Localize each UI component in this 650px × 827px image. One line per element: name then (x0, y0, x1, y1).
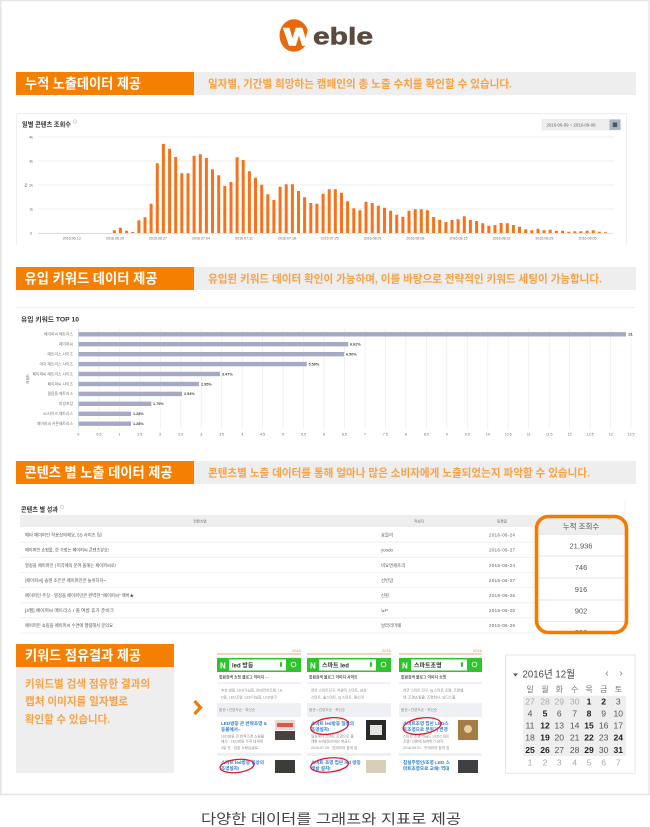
x axis values: 6.5 (342, 432, 347, 436)
x axis values: 11 (527, 432, 531, 436)
table header row (20, 515, 539, 527)
keyword labels: 페이퍼씨 (59, 342, 73, 346)
search capture 3: 스마트조명: 2016.09.01 · 인테리어 참의 집 (403, 745, 449, 750)
value labels (133, 333, 633, 426)
keyword labels (32, 332, 74, 426)
search capture 2: 스마트 led: 조명설치! (311, 726, 330, 733)
date grid: 1 (587, 696, 592, 706)
weekday row: 목 (585, 685, 593, 694)
date grid: 19 (540, 732, 550, 742)
search capture 2: 스마트 led: N (310, 662, 316, 670)
search capture 3: 스마트조명 (399, 648, 483, 773)
date grid: 9 (601, 708, 606, 718)
date grid: 27 (555, 745, 564, 755)
search capture 3: 스마트조명: 트조명으로 분위기 변경 (403, 726, 448, 733)
search capture 3: 스마트조명: 스마트 조명 버금드 LED스마트 (403, 734, 450, 738)
date grid: 6 (557, 708, 562, 718)
search capture 2: 스마트 led: 생활 설치! (311, 765, 331, 772)
description: 일자별, 기간별 희망하는 캠페인의 총 노출 수치를 확인할 수 있습니다. (208, 76, 512, 90)
date grid: 6 (601, 757, 606, 767)
date grid: 30 (570, 696, 580, 706)
x axis values: 7 (364, 432, 366, 436)
x axis date labels: 2016.06.13 (63, 236, 81, 240)
table rows: 선빈맘 (381, 577, 393, 583)
search capture 2: 스마트 led: 스마트 조명 집안 led 방등 (311, 759, 362, 766)
value labels: 1.28% (133, 422, 144, 426)
date range picker (542, 120, 620, 130)
arrow: chevron (194, 701, 200, 714)
x axis date labels: 2016.08.01 (364, 236, 382, 240)
date grid: 28 (570, 745, 580, 755)
date grid: 5 (543, 708, 548, 718)
search capture 2: 스마트 led: 통합검색 블로그 이미지 사이트 (309, 674, 358, 680)
x axis date labels: 2016.08.08 (406, 236, 424, 240)
date grid: 27 (525, 696, 535, 706)
date grid: 7 (572, 708, 577, 718)
bars (79, 332, 626, 426)
heading: 누적 노출데이터 제공 (25, 76, 141, 92)
table rows: 뇨P (381, 608, 388, 613)
search capture 2: 스마트 led: 2016 (382, 648, 392, 653)
date grid: 5 (587, 757, 592, 767)
x axis values: 2.5 (178, 432, 183, 436)
x axis values: 1.5 (137, 432, 142, 436)
table title: 콘텐츠 별 성과 (21, 504, 58, 514)
calendar: 2016년 12월 (506, 655, 635, 773)
heading: 키워드 점유결과 제공 (25, 648, 141, 664)
table header row: 등록일 (497, 518, 507, 524)
x axis date labels (63, 236, 596, 240)
date grid: 4 (572, 757, 577, 767)
search capture 3: 스마트조명: 엔, 조명쇼핑몰, 조명회사, 닐디스플 (403, 694, 456, 700)
date range picker: 2016-06-09 ~ 2016-09-08 (546, 122, 596, 128)
y axis labels: 2k (29, 184, 33, 188)
keyword labels: 페이퍼씨 매트리스 (44, 332, 74, 337)
table rows: 2016-06-24 (489, 532, 516, 538)
caption: 다양한 데이터를 그래프와 지표로 제공 (201, 811, 461, 827)
month title: 2016년 12월 (522, 668, 575, 680)
month arrows (606, 672, 622, 676)
value labels: 6.50% (346, 352, 357, 356)
date grid: 14 (570, 720, 580, 730)
search capture 2: 스마트 led: 연관 스마트전구, 차량지 스마트, 삼성 (311, 688, 367, 692)
panel: inbound keywords top 10 chart (16, 308, 635, 436)
search capture 3: 스마트조명: 옵션 • 관련도순 · 최신순 (401, 707, 438, 712)
search capture 1: led 방등 (217, 648, 302, 774)
keyword labels: 매트리스 사이즈 (47, 352, 73, 356)
x axis date labels: 2016.06.27 (149, 236, 167, 240)
table rows: [4월] 페이퍼씨 매트리스 / 올 여름 휴가 준비크 (25, 607, 114, 614)
date grid: 18 (525, 732, 535, 742)
date grid: 24 (614, 732, 623, 742)
column heading: 누적 조회수 (563, 521, 599, 531)
table rows: 페이퍼민 주장 · 열정을 페이퍼민큰 완벽한 "페이퍼씨" 매버★ (25, 592, 135, 599)
x axis values: 12 (568, 432, 572, 436)
search capture 1: led 방등: 2016 (292, 648, 302, 653)
table rows: yoodo (381, 548, 394, 552)
x axis values: 5 (282, 432, 284, 436)
heading: 유입 키워드 데이터 제공 (24, 270, 158, 286)
search capture 3: 스마트조명: N (402, 662, 408, 670)
weekday row: 화 (556, 685, 564, 694)
x axis values: 9 (446, 432, 448, 436)
description: 키워드별 검색 점유한 결과의 (25, 676, 150, 690)
date grid: 29 (584, 745, 594, 755)
x axis date labels: 2016.06.20 (106, 236, 124, 240)
table rows: 2016-06-20 (489, 608, 516, 613)
search capture 2: 스마트 led: 레한 led방등이에요 버금드 (311, 738, 352, 744)
row dividers (20, 542, 535, 633)
y axis labels (24, 136, 33, 236)
y axis labels: 값 (24, 182, 28, 188)
weekday row: 토 (615, 685, 622, 694)
search capture 1: led 방등: led 방등 (232, 662, 254, 670)
search capture 1: led 방등: 4일 전 · 집밥 사랑님글로 (221, 745, 259, 750)
search capture 3: 스마트조명: 조명! 간편에 설치하기 남자 (403, 738, 444, 744)
search capture 1: led 방등: 추천 방등, LED거실등, 인테리어조명, LE (221, 688, 283, 692)
highlighted column: cumulative views: 806 (575, 628, 587, 637)
date grid: 3 (616, 696, 621, 706)
table rows: 2016-06-27 (489, 578, 516, 583)
x axis date labels: 2016.09.05 (578, 236, 596, 240)
search capture 3: 스마트조명: 연관 스마트 전구, lg 스마트 조명, 조명엘 (403, 688, 464, 692)
y axis labels: 3k (29, 160, 33, 164)
table header row: 컨텐츠명 (193, 518, 207, 524)
date grid: 23 (599, 732, 609, 742)
x axis values: 3.5 (219, 432, 224, 436)
date grid: 31 (614, 745, 623, 755)
help icon (73, 120, 77, 123)
table rows: 날라리마왜 (381, 622, 401, 629)
date grid: 12 (540, 720, 550, 730)
search capture 1: led 방등: 에서 - LED방등 가격 대격세 (221, 738, 263, 744)
table rows: 페이퍼민 쇼핑몰, 한 가정는 페이퍼씨 콘텐츠뷰요! (25, 546, 109, 554)
search capture 2: 스마트 led: 스마트, 솔스마트, lg 스마트, 원스마 (311, 694, 364, 700)
logo: Weble: eble (313, 24, 373, 50)
x axis values: 10 (486, 432, 490, 436)
date grid: 20 (555, 732, 564, 742)
keyword labels: 여자 매트리스 사이즈 (39, 361, 73, 366)
x axis date labels: 2016.07.04 (192, 236, 210, 240)
value labels: 3.47% (222, 372, 233, 376)
table rows: 페이퍼민 쇼핑을 페이퍼씨 수면에 행렬해서 문의요 (25, 622, 113, 629)
keyword labels: 페이퍼씨 사이즈 (47, 381, 73, 386)
x axis values: 9.5 (465, 432, 470, 436)
weekday row: 월 (541, 684, 549, 694)
x axis values (77, 432, 634, 436)
search capture 2: 스마트 led: 일상에서 스마트 조명으로 즐 (311, 734, 354, 738)
x axis values: 1 (118, 432, 120, 436)
logo: Weble: W (284, 24, 314, 51)
y axis labels: 1k (29, 208, 33, 212)
table rows: 신핀 (381, 592, 389, 598)
x axis values: 13 (609, 432, 613, 436)
highlighted column: cumulative views (535, 515, 628, 637)
section header: 유입 키워드 데이터 제공 (16, 267, 636, 290)
value labels: 2.54% (184, 392, 195, 396)
search capture 1: led 방등: 등불에서~ (221, 726, 241, 733)
x axis values: 4.5 (260, 432, 265, 436)
x axis date labels: 2016.08.15 (450, 236, 468, 240)
highlighted column: cumulative views: 902 (575, 606, 587, 616)
x axis date labels: 2016.08.29 (535, 236, 553, 240)
x axis values: 0 (77, 432, 79, 436)
search capture 2: 스마트 led (307, 648, 392, 774)
x axis date labels: 2016.07.25 (321, 236, 339, 240)
x axis values: 11.5 (546, 432, 553, 436)
table header row: 작성자 (414, 518, 425, 524)
table rows: [페이퍼씨] 솔렌 조은큰 페이퍼민큰 놀쉬하자~ (25, 577, 106, 584)
date grid: 17 (614, 720, 623, 730)
table rows (25, 532, 516, 629)
keyword labels: 웜팜들 매트리스 (47, 391, 73, 396)
panel: content performance table (20, 500, 628, 637)
x axis values: 7.5 (383, 432, 388, 436)
date grid: 13 (555, 720, 564, 730)
date grid (525, 696, 623, 767)
table rows: 메타 페이퍼민 적용상의해요, 5S 사이즈 팁! (25, 532, 102, 538)
vertical grid lines (99, 329, 631, 429)
value labels: 1.28% (133, 412, 144, 416)
date grid: 2 (543, 757, 548, 767)
description (25, 676, 150, 726)
date grid: 7 (616, 757, 621, 767)
date grid: 8 (587, 708, 592, 718)
keyword labels: 피방포장 (59, 401, 73, 406)
description: 유입된 키워드 데이터 확인이 가능하며, 이를 바탕으로 전략적인 키워드 세팅이 가능합니다. (208, 272, 602, 286)
date grid: 2 (601, 696, 606, 706)
value labels: 5.50% (308, 362, 320, 366)
date grid: 29 (555, 696, 564, 706)
table rows: 2016-06-24 (489, 563, 516, 568)
grid lines (38, 137, 614, 209)
x axis values: 6 (323, 432, 325, 436)
bars (114, 144, 606, 233)
chart title: 일별 콘텐츠 조회수 (22, 120, 71, 128)
table rows: 2016-06-26 (489, 623, 516, 628)
table rows: 2016-06-26 (489, 593, 516, 598)
x axis values: 8.5 (424, 432, 429, 436)
x axis values: 5.5 (301, 432, 306, 436)
weekday row: 일 (526, 685, 534, 694)
search capture 1: led 방등: LED방등 큰 반짝조명 쇼핑몰 (221, 734, 265, 738)
callout: orange rounded highlight (536, 516, 626, 632)
date grid: 4 (528, 708, 533, 718)
table rows: 효돌이 (381, 532, 393, 538)
weekday row (526, 684, 622, 694)
search capture 3: 스마트조명: 스마트조명 (414, 662, 442, 670)
keyword labels: 페이퍼씨 커튼매트리스 (37, 421, 73, 426)
date grid: 1 (528, 757, 533, 767)
date grid: 11 (526, 720, 535, 730)
chart title: 유입 키워드 TOP 10 (21, 314, 79, 324)
value labels: 6.62% (350, 342, 361, 346)
search capture 1: led 방등: N (220, 662, 226, 670)
search capture 3: 스마트조명: 마트조명으로 교체! 역대 (403, 765, 449, 772)
weekday row: 금 (600, 685, 607, 694)
axis title: 키워드 (25, 373, 30, 384)
section header: 누적 노출데이터 제공 (16, 72, 636, 95)
x axis date labels: 2016.07.18 (278, 236, 296, 240)
date grid: 22 (584, 732, 594, 742)
table rows: 2016-06-27 (489, 548, 516, 552)
search capture 1: led 방등: 조명설치! (221, 765, 240, 772)
search capture 3: 스마트조명: 침실주명인/조명 LED 스 (403, 759, 451, 766)
search capture 3: 스마트조명: 2016 (473, 648, 483, 653)
y axis labels: 0 (30, 232, 32, 236)
search capture 2: 스마트 led: 스마트 led방등 일상의 (311, 720, 354, 727)
x axis values: 3 (200, 432, 202, 436)
date grid: 16 (599, 720, 609, 730)
search capture 1: led 방등: D등, LED조명, LED거실등, LED방구 (221, 694, 278, 700)
help icon (60, 505, 64, 509)
values: 21,936 (570, 542, 592, 550)
description: 캡처 이미지를 일자별로 (25, 694, 128, 708)
table rows: 열정을 페이퍼민 | 미각에의 문여 올해는 페이퍼씨로! (25, 562, 116, 569)
keyword labels: 페이퍼씨 매트리스 사이즈 (32, 371, 73, 376)
value labels: 2.95% (201, 382, 212, 386)
search capture 2: 스마트 led: 스마트 led (322, 662, 349, 670)
x axis values: 13.5 (628, 432, 634, 436)
search capture 1: led 방등: LED방등 큰 반짝조명 & (221, 720, 268, 727)
search capture 3: 스마트조명: 스마트조명 집안 LED스 (403, 720, 449, 727)
table rows: 비요면세프리 (381, 562, 405, 569)
description: 확인할 수 있습니다. (25, 712, 110, 726)
weekday row: 수 (571, 685, 578, 694)
date grid: 10 (614, 708, 623, 718)
x axis values: 2 (159, 432, 161, 436)
x axis values: 8 (405, 432, 407, 436)
date grid: 30 (599, 745, 609, 755)
search capture 1: led 방등: 옵션 • 관련도순 · 최신순 (219, 707, 256, 712)
description: 콘텐츠별 노출 데이터를 통해 얼마나 많은 소비자에게 노출되었는지 파악할 수 있습니다. (208, 466, 590, 480)
x axis values: 0.5 (96, 432, 101, 436)
search capture 2: 스마트 led: 옵션 • 관련도순 · 최신순 (309, 707, 346, 712)
date grid: 28 (540, 696, 550, 706)
section header: 콘텐츠 별 노출 데이터 제공 (16, 461, 636, 484)
keyword labels: 50사이즈 매트리스 (43, 411, 74, 416)
search capture 1: led 방등: 통합검색 쇼핑 블로그 이미지 ··· (219, 674, 269, 680)
y axis labels: 4k (29, 136, 33, 140)
x axis date labels: 2016.08.22 (493, 236, 511, 240)
value labels: 1.79% (153, 402, 164, 406)
highlighted column: cumulative views: 916 (575, 585, 587, 594)
value labels: 13. (628, 333, 633, 337)
panel: keyword share results (16, 644, 174, 773)
search capture 2: 스마트 led: 2016.07.29 · 인테리어 참의 집 (311, 745, 357, 750)
x axis values: 12.5 (587, 432, 594, 436)
panel: daily content views bar chart (16, 114, 626, 245)
date grid: 21 (570, 732, 580, 742)
dropdown triangle (513, 674, 518, 676)
heading: 콘텐츠 별 노출 데이터 제공 (24, 464, 173, 480)
search capture 1: led 방등: 스마트 led방등 일상의 (221, 759, 264, 766)
x axis date labels: 2016.07.11 (235, 236, 253, 240)
x axis values: 4 (241, 432, 243, 436)
date grid: 26 (540, 745, 550, 755)
highlighted column: cumulative views: 746 (575, 563, 587, 572)
logo: Weble (280, 19, 373, 52)
date grid: 3 (557, 757, 562, 767)
date grid: 25 (525, 745, 535, 755)
date grid: 15 (584, 720, 594, 730)
x axis values: 10.5 (505, 432, 512, 436)
search capture 3: 스마트조명: 통합검색 블로그 이미지 쇼핑 (401, 674, 447, 680)
